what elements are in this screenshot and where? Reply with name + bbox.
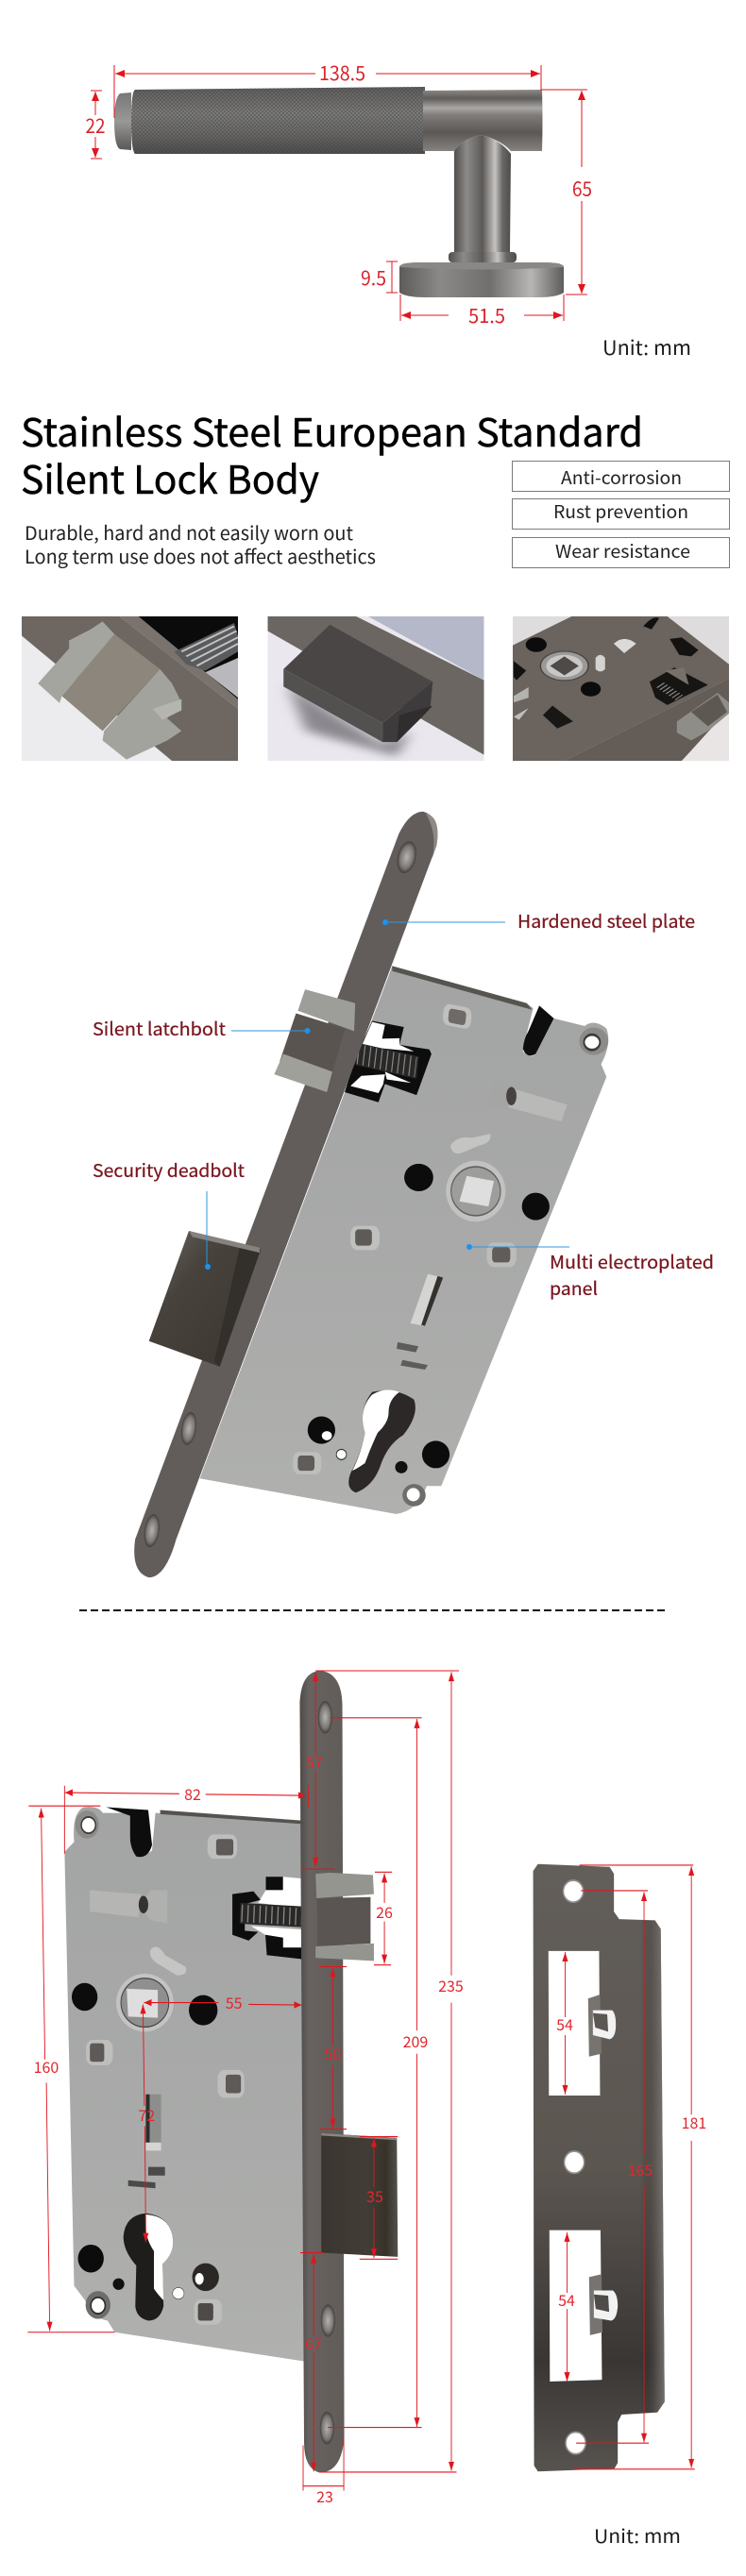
dimension 82: 82 (184, 1782, 201, 1805)
latch opening (232, 1877, 302, 1960)
lock illustration (64, 1671, 398, 2473)
top edge (392, 966, 532, 1010)
face plate screw holes (142, 836, 420, 1550)
side plate (200, 966, 608, 1514)
strike windows (549, 1951, 602, 2382)
tag: anti-corrosion (512, 461, 729, 491)
callout: silent latchbolt (93, 1016, 310, 1041)
security deadbolt (321, 2133, 398, 2257)
callout: security deadbolt: Security deadbolt (93, 1157, 245, 1183)
ear ring top (579, 1028, 608, 1055)
strike tabs (588, 1995, 618, 2335)
dimension 181: 181 (682, 2111, 706, 2133)
tag: anti-corrosion: Anti-corrosion (561, 464, 682, 490)
dimension 160: 160 (34, 2055, 59, 2078)
side plate (64, 1807, 304, 2361)
handle cap (114, 93, 131, 150)
tag: rust prevention (512, 498, 729, 529)
tag: wear resistance: Wear resistance (555, 538, 690, 564)
dimension 23: 23 (316, 2484, 333, 2507)
lock body details (350, 1003, 568, 1370)
spring (357, 1054, 417, 1068)
heading: Silent Lock Body (21, 448, 319, 505)
dimension lines: handle (91, 65, 587, 321)
strike holes (563, 1880, 585, 2454)
silent latchbolt (315, 1873, 374, 1961)
dimension lines (27, 1671, 695, 2491)
dimension 26: 26 (376, 1900, 393, 1923)
callout: multi electroplated panel (466, 1244, 714, 1301)
dimension 35: 35 (366, 2184, 383, 2207)
dimension 65: 65 (572, 174, 592, 202)
photo: lock body back close-up (513, 616, 729, 761)
screw holes (318, 1701, 335, 2444)
dimension 54 lower: 54 (558, 2288, 575, 2311)
unit note: Unit: mm (602, 333, 691, 362)
mortise slot (523, 1005, 554, 1055)
handle head (423, 90, 542, 151)
handle stem (454, 135, 511, 252)
strike plate (534, 1864, 665, 2471)
dimension 67: 67 (305, 2332, 322, 2354)
euro cylinder keyhole (124, 2214, 173, 2320)
panel: door handle with dimensions (85, 59, 691, 362)
dimension 209: 209 (403, 2029, 428, 2052)
description text: Durable, hard and not easily worn out (25, 518, 353, 546)
description text (25, 518, 376, 569)
mortise slot (106, 1807, 152, 1857)
knurled handle grip (131, 87, 425, 154)
dimension 50: 50 (325, 2042, 341, 2064)
round rose base (399, 262, 564, 297)
lock body illustration (134, 812, 608, 1577)
tag: wear resistance (512, 538, 729, 568)
dimension 9.5: 9.5 (361, 263, 386, 292)
panel: lock body with callouts (93, 812, 714, 1577)
photo: security deadbolt close-up (268, 616, 483, 761)
callout: multi electroplated panel: Multi electroplated (550, 1249, 714, 1274)
callout: hardened steel plate (382, 908, 695, 934)
euro cylinder keyhole (348, 1390, 415, 1492)
spring (240, 1913, 302, 1917)
callout: hardened steel plate: Hardened steel plate (517, 908, 695, 934)
feature tags (512, 461, 729, 568)
dimension 72: 72 (139, 2103, 155, 2126)
lock body details (72, 1834, 245, 2325)
dimension 235: 235 (438, 1974, 464, 1996)
face plate (134, 812, 437, 1577)
security deadbolt (149, 1231, 261, 1367)
heading: Stainless Steel European Standard (21, 401, 643, 458)
ear rings (75, 1810, 110, 2319)
stem collar (449, 252, 517, 262)
dimension 22: 22 (85, 111, 106, 140)
dimension 51.5: 51.5 (468, 301, 505, 329)
callout: security deadbolt (93, 1157, 245, 1270)
face plate (299, 1671, 345, 2473)
dimension 54 upper: 54 (556, 2012, 573, 2035)
unit note: Unit: mm (594, 2521, 681, 2549)
panel: lock body dimension drawing (27, 1671, 706, 2549)
dimension 57: 57 (306, 1750, 323, 1773)
dimension 55: 55 (226, 1991, 243, 2013)
callout: silent latchbolt: Silent latchbolt (93, 1016, 226, 1041)
dimension 165: 165 (628, 2158, 653, 2180)
lower holes (78, 2245, 219, 2299)
callout: multi electroplated panel: panel (550, 1275, 598, 1301)
photo: silent latchbolt close-up (22, 616, 238, 761)
dimension 138.5: 138.5 (319, 59, 365, 87)
latch opening (345, 1021, 432, 1103)
lower holes (293, 1417, 449, 1507)
heading (21, 401, 643, 505)
description text: Long term use does not affect aesthetics (25, 542, 376, 569)
tag: rust prevention: Rust prevention (553, 498, 688, 524)
silent latchbolt (274, 989, 355, 1092)
